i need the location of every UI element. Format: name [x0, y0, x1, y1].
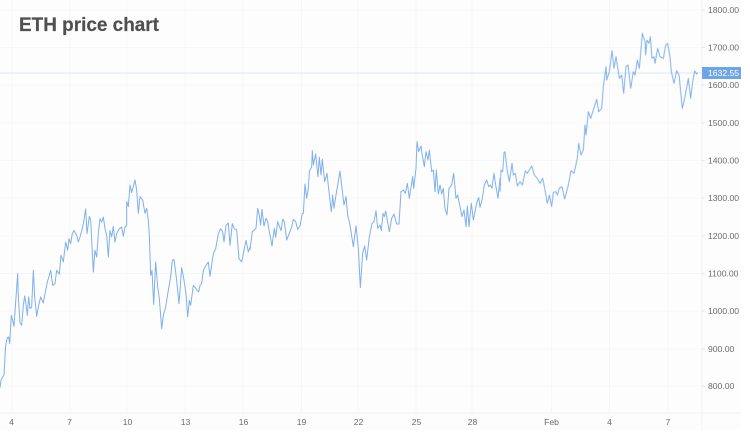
current price tag: 1632.55 — [708, 68, 739, 78]
x axis labels: 7 — [666, 417, 671, 427]
current price tag — [702, 67, 741, 79]
x axis labels: 28 — [468, 417, 477, 427]
y axis labels: 1400.00 — [708, 156, 739, 166]
x axis labels: 4 — [607, 417, 612, 427]
y axis labels: 800.00 — [708, 381, 735, 391]
x axis labels: 10 — [123, 417, 132, 427]
y axis labels: 1600.00 — [708, 80, 739, 90]
price line series — [0, 33, 698, 388]
x axis labels: 4 — [9, 417, 14, 427]
y axis labels: 1300.00 — [708, 193, 739, 203]
y axis labels: 1200.00 — [708, 231, 739, 241]
y axis labels: 1500.00 — [708, 118, 739, 128]
x axis labels: 25 — [412, 417, 421, 427]
title: ETH price chart — [19, 14, 159, 36]
current price line — [0, 72, 702, 74]
y axis labels: 1100.00 — [708, 268, 739, 278]
y axis labels: 1000.00 — [708, 306, 739, 316]
y axis labels: 900.00 — [708, 344, 735, 354]
x axis labels: 13 — [181, 417, 190, 427]
y axis labels — [708, 5, 739, 391]
y axis labels: 1800.00 — [708, 5, 739, 15]
x axis labels: 22 — [354, 417, 363, 427]
x axis labels: 16 — [239, 417, 248, 427]
x axis labels: 7 — [67, 417, 72, 427]
y axis labels: 1700.00 — [708, 42, 739, 52]
x axis labels: 19 — [297, 417, 306, 427]
x axis labels: Feb — [544, 417, 559, 427]
x axis labels — [9, 417, 671, 427]
